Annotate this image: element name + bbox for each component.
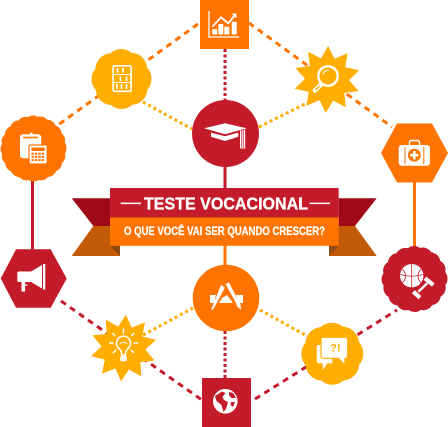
connector: bottom left dashed	[61, 301, 202, 400]
icon: globe	[213, 389, 238, 414]
icon: lightbulb	[109, 328, 138, 361]
node: lightbulb star	[89, 312, 158, 384]
connector: vertical dotted	[224, 49, 226, 378]
icon: graduation cap	[204, 123, 247, 149]
icon: magnifying glass	[315, 66, 338, 90]
banner title panel	[110, 188, 339, 218]
node: abacus badge	[108, 65, 136, 93]
icon: megaphone	[17, 264, 45, 292]
icon: abacus	[113, 66, 131, 91]
node: speech badge	[317, 337, 348, 370]
ribbon: left tail	[72, 198, 120, 256]
connector: top square to right	[249, 23, 392, 127]
icon: basketball and dumbbell	[400, 264, 433, 298]
connector: bottom right dashed	[255, 310, 397, 399]
node: calculator badge	[10, 124, 58, 172]
connector: right solid	[225, 180, 414, 267]
banner subtitle panel	[110, 218, 339, 246]
banner	[72, 188, 377, 256]
connector: top square to left	[58, 24, 198, 125]
node: app circle	[193, 265, 259, 331]
node: magnifier star	[294, 45, 360, 114]
connector: yellow dots around cap	[143, 102, 307, 129]
icon: speech bubbles: ?!	[330, 343, 340, 355]
subtitle: O QUE VOCÊ VAI SER QUANDO CRESCER?	[124, 225, 325, 238]
title rule: right	[310, 203, 330, 204]
node: globe square	[202, 378, 251, 427]
node: chart square	[200, 0, 249, 49]
icon: clipboard and calculator	[20, 133, 47, 164]
connector: yellow dots around app circle	[143, 308, 307, 336]
connectors	[32, 23, 414, 400]
icon: pencil and brush A	[210, 282, 243, 310]
title: TESTE VOCACIONAL	[144, 193, 308, 213]
connector: left solid	[32, 165, 225, 252]
icon: first aid kit	[399, 140, 430, 166]
node: basketball badge	[392, 256, 438, 302]
node: graduation circle	[192, 100, 259, 167]
ribbon: right tail	[329, 198, 377, 256]
node: first aid hexagon	[381, 124, 448, 182]
icon: bar chart	[209, 11, 239, 37]
title rule: left	[121, 203, 141, 204]
node: megaphone hexagon	[1, 249, 67, 308]
